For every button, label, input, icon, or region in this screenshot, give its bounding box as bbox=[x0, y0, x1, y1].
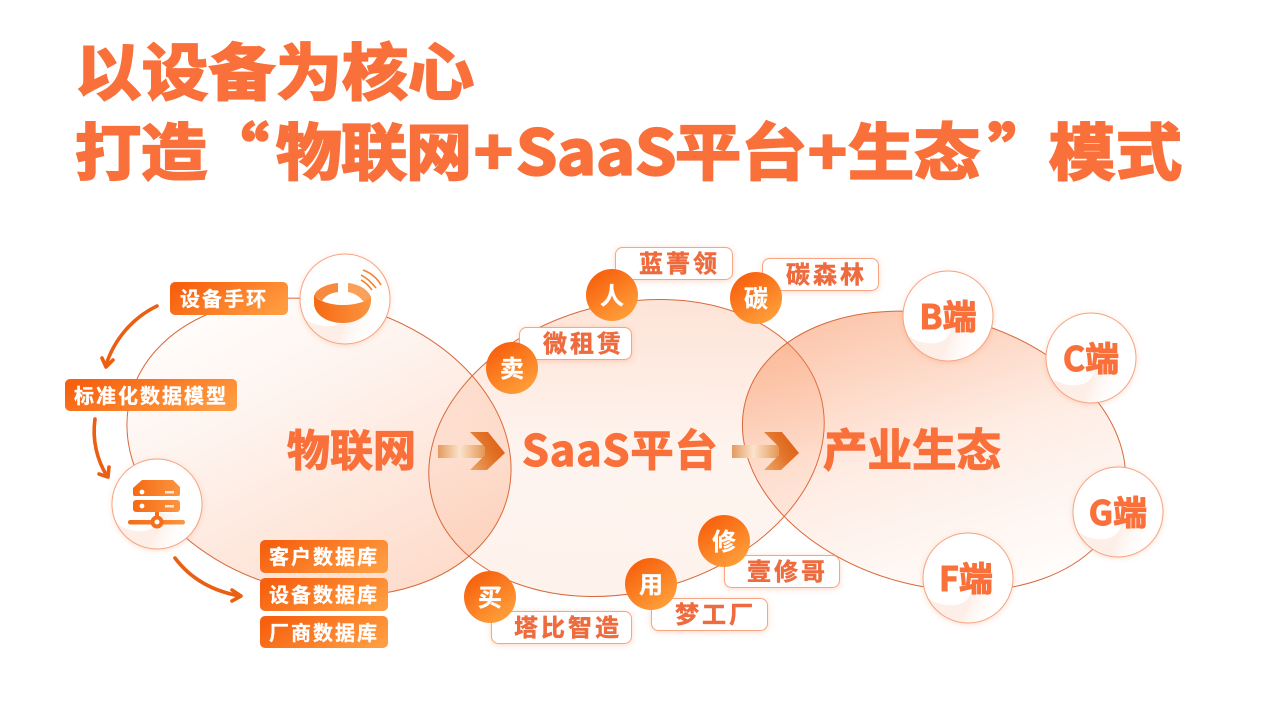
node: 碳 bbox=[730, 272, 782, 324]
node: 碳: 碳 bbox=[744, 279, 768, 314]
tag: 设备手环: 设备手环 bbox=[180, 283, 268, 312]
node: G端 bbox=[1068, 467, 1163, 562]
tag: 厂商数据库: 厂商数据库 bbox=[269, 617, 379, 646]
tag: 蓝菁领 bbox=[616, 244, 732, 280]
title: 生态 bbox=[848, 104, 980, 193]
tag: 客户数据库: 客户数据库 bbox=[269, 541, 379, 570]
node: 买: 买 bbox=[478, 578, 502, 613]
heading: 物联网: 物联网 bbox=[287, 417, 416, 479]
title: “ bbox=[203, 104, 269, 193]
circle: 产业生态 bbox=[711, 270, 1157, 632]
node: 人 bbox=[586, 269, 638, 321]
title: ” bbox=[988, 104, 1054, 193]
node: F端: F端 bbox=[939, 552, 993, 601]
title: SaaS bbox=[516, 104, 676, 193]
tag: 设备手环 bbox=[170, 282, 288, 315]
heading: SaaS平台: SaaS平台 bbox=[522, 417, 718, 479]
icon: 服务器 bbox=[107, 459, 202, 554]
arrow: 数据模型 to 数据库 bbox=[94, 419, 109, 477]
node: F端 bbox=[918, 533, 1013, 628]
node: 卖: 卖 bbox=[500, 349, 524, 384]
arrow: 物联网 to SaaS bbox=[438, 432, 505, 470]
title: 以设备为核心 bbox=[75, 24, 474, 113]
title bbox=[75, 24, 1182, 193]
node: C端 bbox=[1041, 313, 1136, 408]
tag: 微租赁: 微租赁 bbox=[543, 324, 624, 359]
node: 修 bbox=[698, 515, 750, 567]
tag: 壹修哥 bbox=[724, 552, 840, 588]
node: 用: 用 bbox=[639, 565, 663, 600]
icon: 手环 bbox=[295, 254, 390, 349]
arrow: 服务器 to 数据库 bbox=[175, 558, 241, 601]
tag: 碳森林 bbox=[762, 255, 878, 290]
node: 买 bbox=[464, 571, 516, 623]
arrow: SaaS to 产业生态 bbox=[732, 432, 799, 470]
circle: 物联网 bbox=[93, 256, 545, 638]
node: G端: G端 bbox=[1089, 486, 1147, 535]
title: 平台 bbox=[675, 104, 807, 193]
heading: 产业生态: 产业生态 bbox=[823, 414, 1001, 479]
tag: 设备数据库: 设备数据库 bbox=[269, 579, 379, 608]
tag: 梦工厂: 梦工厂 bbox=[675, 595, 756, 630]
node: 卖 bbox=[486, 342, 538, 394]
tag: 标准化数据模型: 标准化数据模型 bbox=[74, 380, 228, 409]
tag: 蓝菁领: 蓝菁领 bbox=[639, 244, 720, 279]
tag: 塔比智造: 塔比智造 bbox=[514, 608, 622, 643]
title: + bbox=[808, 104, 847, 193]
node: 用 bbox=[625, 558, 677, 610]
tag: 壹修哥: 壹修哥 bbox=[747, 552, 828, 587]
node: 人: 人 bbox=[600, 276, 624, 311]
title: 物联网 bbox=[276, 104, 472, 193]
arrow: 手环 to 数据模型 bbox=[102, 306, 157, 367]
tag: 梦工厂 bbox=[652, 595, 768, 630]
node: 修: 修 bbox=[712, 522, 736, 557]
title: 模式 bbox=[1049, 104, 1182, 193]
tag: 碳森林: 碳森林 bbox=[786, 255, 867, 290]
title: + bbox=[474, 104, 513, 193]
node: B端: B端 bbox=[919, 290, 977, 339]
node: B端 bbox=[898, 271, 993, 366]
circle: SaaS平台 bbox=[395, 257, 858, 639]
title: 打造 bbox=[75, 104, 207, 193]
node: C端: C端 bbox=[1063, 332, 1119, 381]
